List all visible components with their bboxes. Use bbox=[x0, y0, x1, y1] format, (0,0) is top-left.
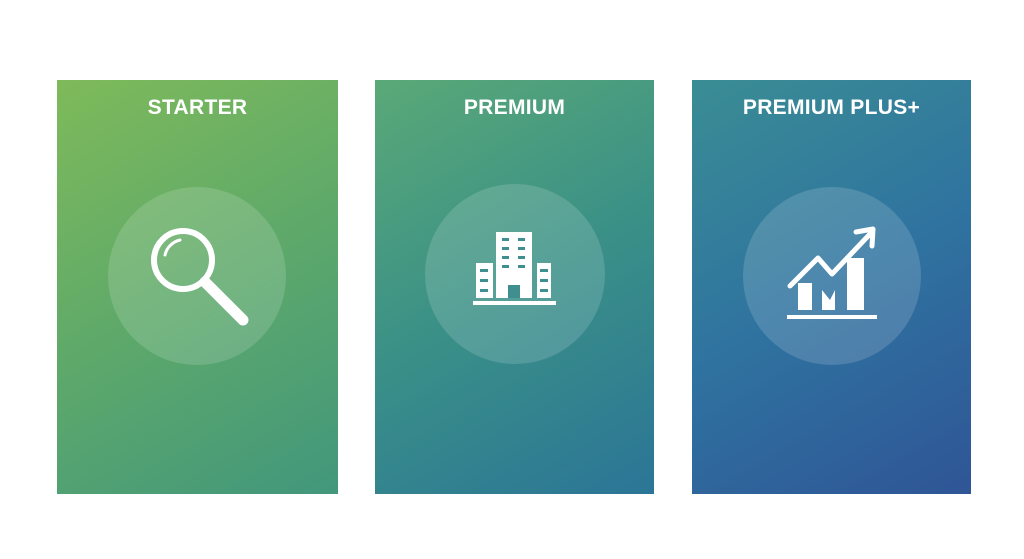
heading: starter: STARTER bbox=[148, 96, 247, 119]
heading: premium: PREMIUM bbox=[464, 96, 565, 119]
icon: growth chart bbox=[787, 226, 877, 319]
icon: building bbox=[473, 232, 556, 305]
icon: magnifier bbox=[151, 228, 248, 326]
icon circle: premium bbox=[425, 184, 605, 364]
heading: premium plus: PREMIUM PLUS+ bbox=[743, 96, 920, 119]
panel: starter bbox=[57, 80, 338, 494]
panel: premium plus bbox=[692, 80, 971, 494]
panel: premium bbox=[375, 80, 654, 494]
icon circle: premium plus bbox=[743, 187, 921, 365]
icon circle: starter bbox=[108, 187, 286, 365]
